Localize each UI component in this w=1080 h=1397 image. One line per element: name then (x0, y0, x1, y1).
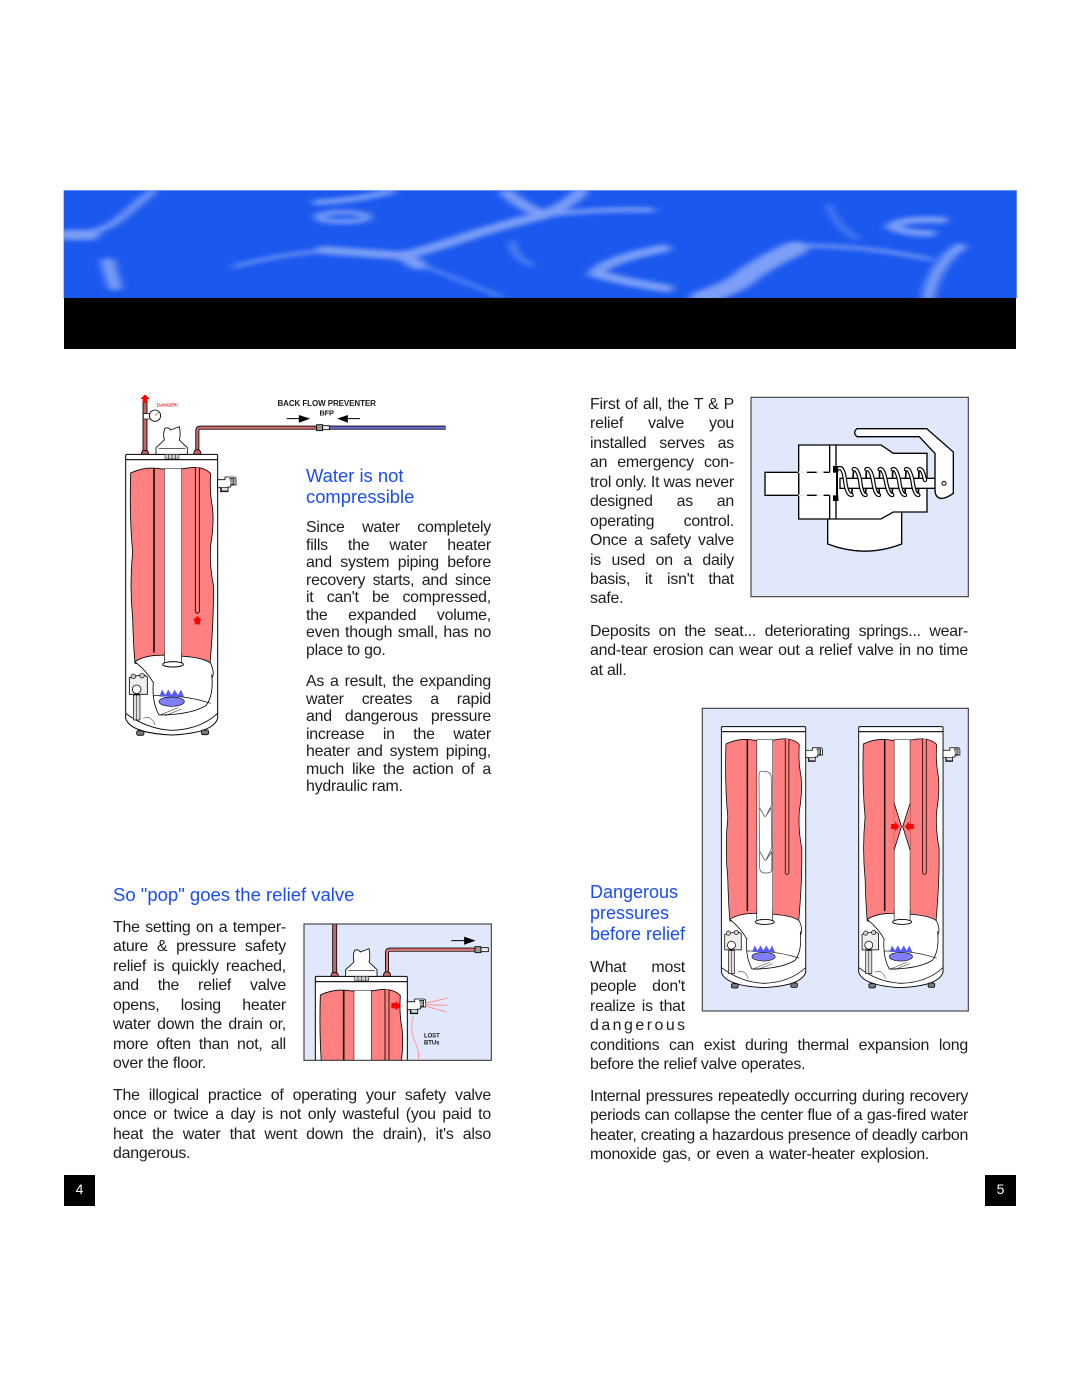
text: deposits: and-tear erosion can wear out a relief valve in no time (590, 642, 968, 659)
spray lines (425, 998, 447, 1012)
text: deposits: at all. (590, 662, 626, 679)
text: first of all: safe. (590, 590, 623, 607)
page number 5 (985, 1175, 1016, 1206)
heading: dangerous pressures before relief: pressures (590, 903, 669, 923)
text: since water: and system piping before (306, 554, 491, 571)
heading: dangerous pressures before relief (590, 882, 686, 944)
text: first of all: designed as an (590, 493, 734, 510)
text: since water: recovery starts, and since (306, 572, 491, 588)
water heater tank (126, 427, 236, 735)
text: first of all: Once a safety valve (590, 532, 734, 549)
text: as a result (306, 673, 492, 795)
text: the illogical practice (113, 1087, 491, 1162)
text: what most people: people don't (590, 978, 685, 995)
supply pipe (194, 425, 446, 454)
arrow: right (287, 416, 309, 422)
text: first of all (590, 396, 734, 607)
heater: flue with scale (721, 727, 823, 988)
text: what most people: before the relief valve operates. (590, 1056, 805, 1073)
label: lost BTUs: LOST (424, 1033, 440, 1039)
page number 4: 4 (76, 1181, 83, 1197)
text: since water: even though small, has no (306, 624, 491, 641)
label: BFP: BFP (319, 409, 334, 418)
drain water (412, 1016, 419, 1060)
text: as a result: much like the action of a (306, 760, 491, 778)
text: the setting: ature & pressure safety (113, 938, 286, 955)
text: internal pressures (590, 1088, 968, 1163)
heading: water is not compressible (306, 465, 414, 507)
text: the setting: water down the drain or, (113, 1016, 286, 1033)
text: the illogical practice: heat the water that went down the drain), it's also (113, 1126, 491, 1143)
text: first of all: trol only. It was never (590, 474, 734, 491)
text: what most people (590, 959, 968, 1073)
text: the setting: opens, losing heater (113, 997, 286, 1014)
arrow: left (339, 416, 360, 422)
text: deposits (590, 623, 968, 679)
text: first of all: is used on a daily (590, 552, 734, 568)
text: as a result: As a result, the expanding (306, 673, 491, 690)
label: BTUs: BTUs (424, 1041, 440, 1047)
text: first of all: operating control. (590, 513, 734, 530)
text: the setting: over the floor. (113, 1055, 206, 1072)
text: since water: fills the water heater (306, 536, 491, 554)
banner: water texture (64, 190, 1017, 298)
text: since water: the expanded volume, (306, 606, 491, 624)
hot water pipe to gauge (140, 394, 161, 454)
text: what most people: What most (590, 959, 685, 976)
arrow: flow (451, 937, 474, 944)
text: internal pressures: periods can collapse the center flue of a gas-fired water (590, 1107, 968, 1124)
text: first of all: basis, it isn't that (590, 571, 734, 588)
text: the illogical practice: The illogical practice of operating your safety valve (113, 1087, 491, 1104)
text: the setting: and the relief valve (113, 977, 286, 994)
page number 4 (64, 1175, 95, 1206)
text: first of all: an emergency con- (590, 454, 734, 471)
text: as a result: water creates a rapid (306, 690, 491, 708)
text: since water: place to go. (306, 642, 386, 658)
text: deposits: Deposits on the seat... deteriorating springs... wear- (590, 623, 968, 640)
text: internal pressures: monoxide gas, or even a water-heater explosion. (590, 1146, 929, 1163)
text: as a result: increase in the water (306, 726, 491, 742)
text: what most people: dangerous (590, 1017, 688, 1034)
text: first of all: relief valve you (590, 415, 734, 432)
panel: two heaters, damaged flue (702, 708, 968, 1011)
text: since water: it can't be compressed, (306, 589, 491, 606)
text: internal pressures: Internal pressures repeatedly occurring during recovery (590, 1088, 968, 1105)
text: the setting: The setting on a temper- (113, 919, 286, 936)
text: since water: Since water completely (306, 519, 491, 536)
text: the setting: relief is quickly reached, (113, 958, 286, 975)
heading: water is not compressible: Water is not (306, 465, 403, 486)
text: the illogical practice: dangerous. (113, 1145, 190, 1162)
text: what most people: realize is that (590, 998, 685, 1015)
text: since water (306, 519, 492, 658)
black band (64, 298, 1016, 349)
text: as a result: and dangerous pressure (306, 708, 491, 725)
page number 5: 5 (997, 1181, 1004, 1197)
panel: relief valve cross-section (751, 397, 968, 597)
heading: dangerous pressures before relief: before relief (590, 924, 685, 944)
text: first of all: First of all, the T & P (590, 396, 734, 413)
heading: so pop goes the relief valve: So "pop" goes the relief valve (113, 884, 354, 905)
text: the setting (113, 919, 286, 1072)
heading: water is not compressible: compressible (306, 486, 414, 507)
text: as a result: hydraulic ram. (306, 778, 403, 795)
heading: dangerous pressures before relief: Dangerous (590, 882, 678, 902)
heater: collapsing flue (859, 727, 960, 988)
label: back flow preventer: BACK FLOW PREVENTER (277, 399, 376, 408)
text: as a result: heater and system piping, (306, 743, 491, 760)
panel: relief valve discharging (303, 923, 492, 1061)
text: the setting: more often than not, all (113, 1036, 286, 1053)
text: what most people: conditions can exist during thermal expansion long (590, 1037, 968, 1054)
label: danger: DANGER! (157, 402, 178, 407)
text: the illogical practice: once or twice a day is not only wasteful (you paid to (113, 1106, 491, 1123)
spring back strands (852, 469, 919, 495)
text: first of all: installed serves as (590, 435, 734, 452)
text: internal pressures: heater, creating a hazardous presence of deadly carbon (590, 1127, 968, 1144)
diagram: water heater with back flow preventer (126, 394, 446, 735)
